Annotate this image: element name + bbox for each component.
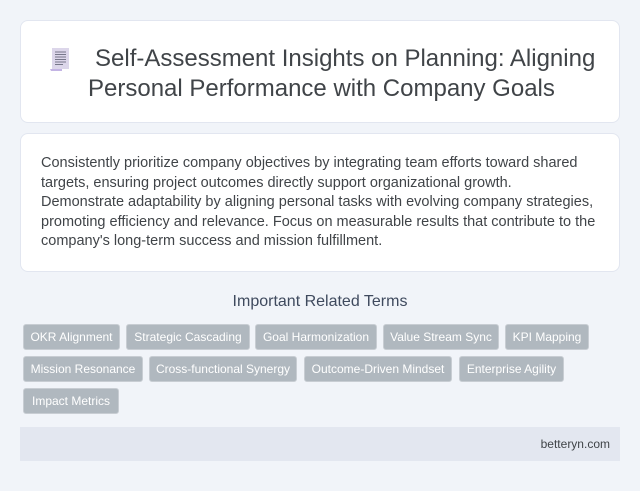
tag: Strategic Cascading xyxy=(134,330,242,344)
related terms heading: Important Related Terms xyxy=(233,293,407,310)
summary text xyxy=(41,155,595,249)
tag: Enterprise Agility xyxy=(467,362,556,376)
tag: Goal Harmonization xyxy=(263,330,369,344)
header panel xyxy=(20,20,620,123)
tag xyxy=(23,388,119,414)
tag: OKR Alignment xyxy=(30,330,113,344)
tag xyxy=(505,324,589,350)
tag list xyxy=(23,324,589,414)
summary text: Demonstrate adaptability by aligning personal tasks with evolving company strategies, xyxy=(41,194,593,210)
tag xyxy=(383,324,499,350)
tag: Impact Metrics xyxy=(32,394,110,408)
tag: Mission Resonance xyxy=(31,362,135,376)
title xyxy=(88,45,595,102)
summary text: Consistently prioritize company objectives by integrating team efforts toward shared xyxy=(41,155,578,171)
tag xyxy=(23,356,143,382)
title: Personal Performance with Company Goals xyxy=(88,75,555,102)
summary text: promoting efficiency and relevance. Focus on measurable results that contribute to the xyxy=(41,214,595,230)
title: Self-Assessment Insights on Planning: Aligning xyxy=(95,45,595,72)
tag xyxy=(149,356,297,382)
tag xyxy=(126,324,250,350)
tag: Cross-functional Synergy xyxy=(156,362,290,376)
tag: KPI Mapping xyxy=(513,330,581,344)
tag xyxy=(23,324,120,350)
tag: Value Stream Sync xyxy=(390,330,492,344)
summary text: company's long-term success and mission fulfillment. xyxy=(41,233,382,249)
tag xyxy=(459,356,564,382)
tag: Outcome-Driven Mindset xyxy=(312,362,444,376)
tag xyxy=(304,356,452,382)
summary panel xyxy=(20,133,620,272)
tag xyxy=(255,324,377,350)
icon: document xyxy=(50,48,69,71)
footer bar xyxy=(20,427,620,461)
summary text: targets, ensuring project outcomes directly support organizational growth. xyxy=(41,174,512,190)
footer source: betteryn.com xyxy=(541,437,610,451)
